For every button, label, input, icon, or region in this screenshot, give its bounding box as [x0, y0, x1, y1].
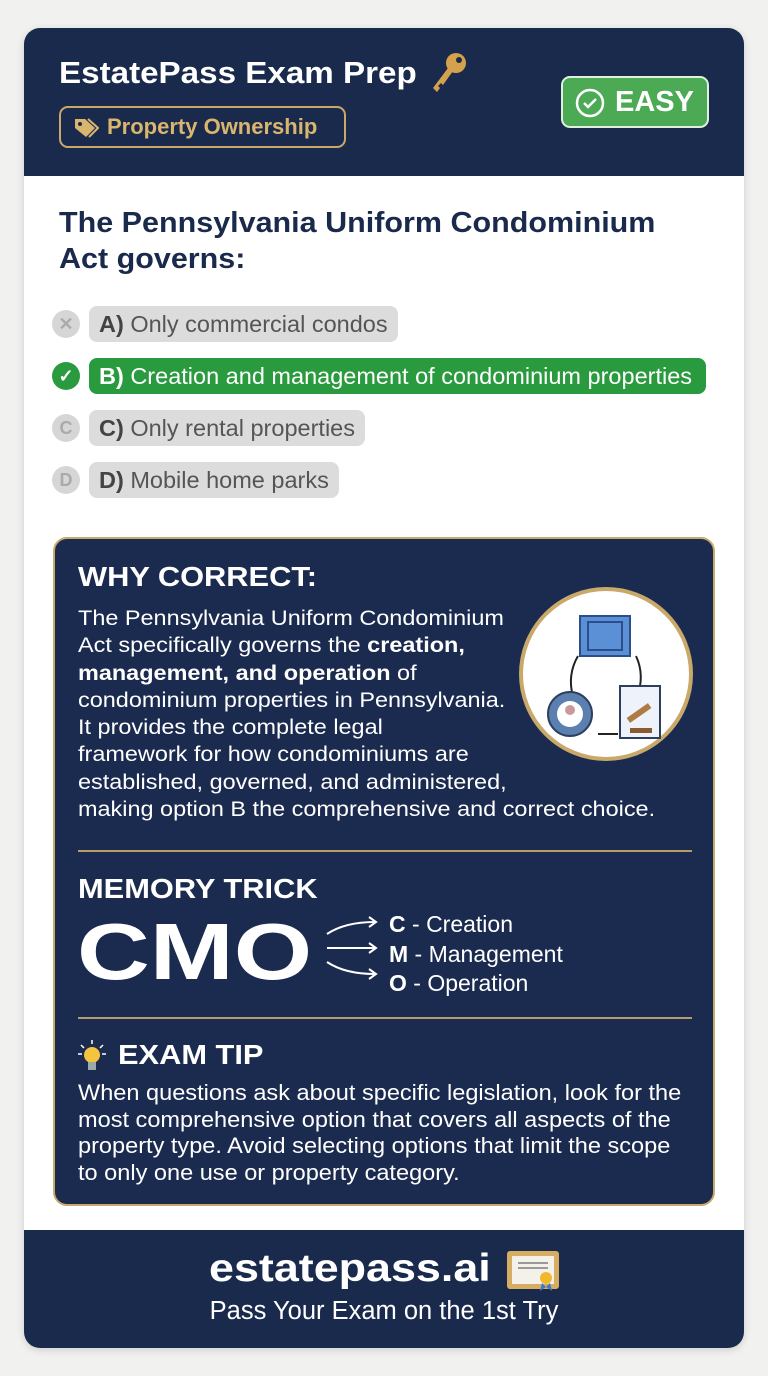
icon: lightbulb: [78, 1040, 106, 1070]
option A: [52, 306, 398, 342]
panel: explanation: [53, 537, 715, 1206]
question: [59, 207, 655, 275]
why correct text: It provides the complete legal: [78, 715, 383, 739]
options: C) Only rental properties: [99, 415, 355, 441]
exam tip text: most comprehensive option that covers all aspects of the: [78, 1106, 671, 1132]
exam tip text: [78, 1080, 681, 1184]
options: A) Only commercial condos: [99, 311, 388, 337]
icon: certificate: [507, 1251, 559, 1291]
why correct text: [78, 606, 655, 821]
mnemonic meanings: M - Management: [389, 940, 563, 966]
question: Act governs:: [59, 243, 245, 275]
option C: [52, 410, 365, 446]
option B correct: [52, 358, 706, 394]
mnemonic meanings: O - Operation: [389, 970, 528, 996]
option D: [52, 462, 339, 498]
footer: [24, 1230, 744, 1348]
why correct text: framework for how condominiums are: [78, 742, 469, 766]
options: B) Creation and management of condominium properties: [99, 363, 692, 389]
icon: key: [433, 53, 466, 92]
why correct text: condominium properties in Pennsylvania.: [78, 688, 505, 712]
icon: condo process circle: [519, 587, 693, 761]
difficulty badge: EASY: [615, 86, 694, 118]
icon: check circle: [576, 88, 604, 118]
arrows: [326, 916, 378, 980]
options: [52, 306, 706, 498]
mnemonic meanings: C - Creation: [389, 911, 513, 937]
exam tip text: When questions ask about specific legislation, look for the: [78, 1080, 681, 1105]
why correct text: established, governed, and administered,: [78, 770, 507, 794]
tagline: Pass Your Exam on the 1st Try: [210, 1297, 558, 1325]
options: ✓: [58, 366, 74, 386]
options: ✕: [58, 314, 74, 334]
why correct text: management, and operation of: [78, 661, 417, 685]
exam tip text: to only one use or property category.: [78, 1160, 460, 1184]
brand: estatepass.ai: [209, 1247, 491, 1290]
category tag: [59, 106, 346, 148]
question: The Pennsylvania Uniform Condominium: [59, 207, 655, 239]
heading: exam tip: EXAM TIP: [118, 1039, 263, 1070]
options: D: [60, 470, 72, 490]
why correct text: Act specifically governs the creation,: [78, 633, 465, 657]
exam tip text: property type. Avoid selecting options that limit the scope: [78, 1133, 670, 1158]
category tag: Property Ownership: [107, 114, 317, 139]
icon: tag: [75, 118, 99, 138]
mnemonic meanings: [389, 911, 563, 996]
header: [24, 28, 744, 176]
heading: why correct: WHY CORRECT:: [78, 561, 317, 592]
options: D) Mobile home parks: [99, 467, 329, 493]
title: EstatePass Exam Prep: [59, 55, 417, 90]
difficulty badge: [561, 76, 709, 128]
CMO mnemonic: CMO: [77, 907, 312, 996]
options: C: [60, 418, 72, 438]
why correct text: making option B the comprehensive and correct choice.: [78, 797, 655, 821]
heading: memory trick: MEMORY TRICK: [78, 873, 318, 904]
why correct text: The Pennsylvania Uniform Condominium: [78, 606, 504, 630]
